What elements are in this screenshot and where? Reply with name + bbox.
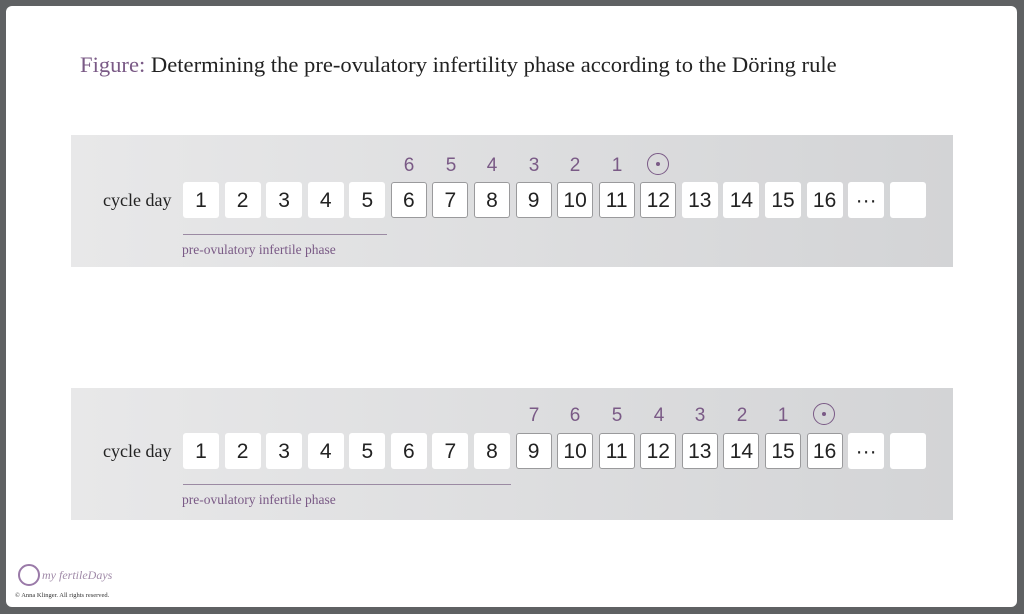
day boxes: 4 xyxy=(320,189,332,212)
day boxes: 5 xyxy=(361,189,373,212)
day boxes: 3 xyxy=(278,189,290,212)
day boxes: 16 xyxy=(813,440,836,463)
day boxes: 9 xyxy=(528,440,539,463)
day boxes: 14 xyxy=(730,189,753,212)
day boxes: 15 xyxy=(771,189,795,212)
day boxes: ··· xyxy=(856,189,877,212)
day boxes xyxy=(183,433,926,469)
countdown numbers: 5 xyxy=(612,405,622,426)
day boxes: 9 xyxy=(528,189,539,212)
panel: example 2 xyxy=(71,388,953,520)
logo xyxy=(18,564,112,586)
day boxes: 7 xyxy=(445,440,456,463)
countdown numbers: 2 xyxy=(737,405,747,426)
day boxes: 11 xyxy=(606,440,628,463)
countdown numbers: 4 xyxy=(487,155,497,176)
day boxes: 3 xyxy=(278,440,290,463)
label: cycle day: cycle day xyxy=(103,190,171,210)
day boxes xyxy=(183,182,926,218)
countdown numbers: 3 xyxy=(695,405,705,426)
title: Figure: Determining the pre-ovulatory infertility phase according to the Döring rule xyxy=(80,52,837,77)
countdown numbers: 1 xyxy=(612,155,622,176)
copyright: © Anna Klinger. All rights reserved. xyxy=(15,592,109,599)
panel: example 1 xyxy=(71,135,953,267)
day boxes: 1 xyxy=(195,189,207,212)
arrow: infertile phase xyxy=(183,234,387,235)
day boxes: 5 xyxy=(361,440,373,463)
day boxes: 2 xyxy=(237,440,248,463)
countdown numbers: 5 xyxy=(446,155,456,176)
day boxes: 13 xyxy=(688,189,711,212)
day boxes: 10 xyxy=(563,189,587,212)
countdown numbers xyxy=(404,153,669,176)
day boxes: ··· xyxy=(856,440,877,463)
day boxes: 2 xyxy=(237,189,248,212)
countdown numbers: 6 xyxy=(404,155,414,176)
day boxes: 11 xyxy=(606,189,628,212)
countdown numbers: 2 xyxy=(570,155,580,176)
day boxes: 7 xyxy=(445,189,456,212)
day boxes: 12 xyxy=(647,440,670,463)
day boxes: 8 xyxy=(486,189,498,212)
countdown numbers: 1 xyxy=(778,405,788,426)
arrow: infertile phase xyxy=(183,484,511,485)
countdown numbers: 4 xyxy=(654,405,664,426)
countdown numbers: 7 xyxy=(529,405,539,426)
logo: my fertileDays xyxy=(42,568,112,582)
day boxes: 8 xyxy=(486,440,498,463)
label: cycle day: cycle day xyxy=(103,441,171,461)
day boxes: 1 xyxy=(195,440,207,463)
day boxes: 13 xyxy=(688,440,711,463)
day boxes: 4 xyxy=(320,440,332,463)
day boxes: 6 xyxy=(403,189,415,212)
day boxes: 15 xyxy=(771,440,795,463)
phase label: pre-ovulatory infertile phase xyxy=(182,492,336,507)
countdown numbers xyxy=(529,403,835,426)
day boxes: 10 xyxy=(563,440,587,463)
phase label: pre-ovulatory infertile phase xyxy=(182,242,336,257)
day boxes: 12 xyxy=(647,189,670,212)
day boxes: 14 xyxy=(730,440,753,463)
countdown numbers: 6 xyxy=(570,405,580,426)
day boxes: 6 xyxy=(403,440,415,463)
day boxes: 16 xyxy=(813,189,836,212)
countdown numbers: 3 xyxy=(529,155,539,176)
